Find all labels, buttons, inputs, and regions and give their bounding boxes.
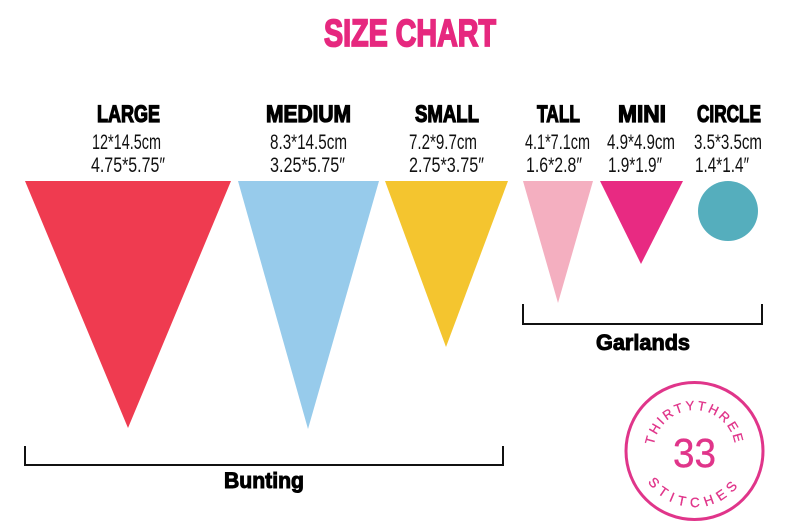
logo text: thirtythree: THIRTYTHREE — [644, 400, 744, 444]
dimensions: tall cm: 4.1*7.1cm — [525, 131, 590, 154]
heading: small: SMALL — [415, 101, 479, 128]
heading: large: LARGE — [97, 101, 160, 128]
pennant: medium — [238, 181, 379, 429]
dimensions: small inches: 2.75*3.75″ — [409, 154, 484, 177]
title: SIZE CHART — [324, 13, 496, 55]
logo text: stitches: STITCHES — [648, 478, 737, 508]
dimensions: large inches: 4.75*5.75″ — [91, 154, 165, 177]
column: tall — [523, 101, 593, 303]
column: small — [385, 101, 508, 347]
heading: medium: MEDIUM — [266, 101, 351, 128]
pennant: tall — [523, 181, 593, 303]
heading: circle: CIRCLE — [697, 101, 761, 128]
dimensions: mini inches: 1.9*1.9″ — [608, 154, 662, 177]
dimensions: circle inches: 1.4*1.4″ — [695, 154, 749, 177]
label: garlands: Garlands — [596, 330, 690, 355]
logo number: 33 — [673, 430, 716, 476]
heading: mini: MINI — [618, 101, 666, 128]
column: mini — [600, 101, 683, 264]
dimensions: small cm: 7.2*9.7cm — [409, 131, 477, 154]
shape: circle — [698, 181, 758, 241]
dimensions: medium inches: 3.25*5.75″ — [270, 154, 345, 177]
dimensions: medium cm: 8.3*14.5cm — [270, 131, 347, 154]
pennant: small — [385, 181, 508, 347]
dimensions: circle cm: 3.5*3.5cm — [694, 131, 762, 154]
dimensions: large cm: 12*14.5cm — [92, 131, 161, 154]
column: medium — [238, 101, 379, 429]
label: bunting: Bunting — [224, 468, 304, 493]
column: circle — [694, 101, 762, 241]
heading: tall: TALL — [537, 101, 580, 128]
pennant: mini — [600, 181, 683, 264]
dimensions: tall inches: 1.6*2.8″ — [526, 154, 582, 177]
bracket: garlands — [523, 304, 762, 324]
dimensions: mini cm: 4.9*4.9cm — [607, 131, 675, 154]
logo: thirtythree stitches badge — [624, 381, 764, 521]
pennant: large — [25, 181, 231, 428]
column: large — [25, 101, 231, 428]
bracket: bunting — [25, 446, 503, 465]
